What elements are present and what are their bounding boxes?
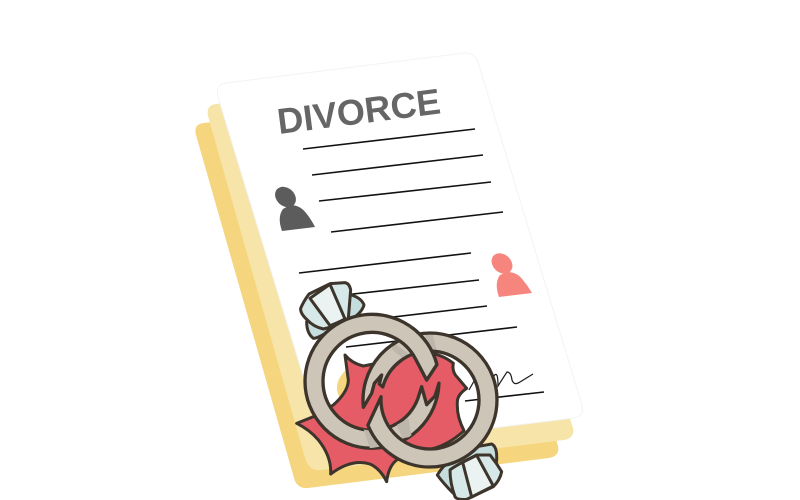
red burst bbox=[297, 353, 467, 482]
yellow shape behind bbox=[337, 369, 355, 403]
bottom diamond front bbox=[450, 455, 502, 499]
bottom diamond facet bbox=[463, 455, 493, 497]
icon: pink person bbox=[487, 249, 532, 297]
middle page bbox=[208, 94, 573, 470]
main paper sheet bbox=[217, 53, 583, 447]
icon: dark person bbox=[271, 183, 315, 231]
top diamond facet bbox=[310, 284, 345, 326]
ring one bbox=[305, 314, 439, 448]
divorce document illustration bbox=[195, 52, 583, 500]
ring one upper crossing bbox=[395, 326, 440, 384]
ring one shadow bbox=[363, 418, 412, 448]
ring two outline bbox=[363, 333, 497, 467]
top diamond bbox=[301, 283, 364, 338]
ring two bbox=[363, 333, 497, 467]
signature bbox=[469, 371, 533, 390]
broken rings illustration bbox=[297, 283, 502, 499]
top diamond front bbox=[301, 283, 351, 329]
back page bbox=[195, 111, 558, 488]
heading: DIVORCE: DIVORCE bbox=[275, 80, 443, 142]
top diamond back bbox=[307, 295, 364, 338]
text lines bbox=[299, 129, 544, 401]
bottom diamond bbox=[437, 444, 502, 499]
ring two shadow bbox=[392, 334, 436, 358]
bottom diamond back bbox=[437, 444, 497, 493]
